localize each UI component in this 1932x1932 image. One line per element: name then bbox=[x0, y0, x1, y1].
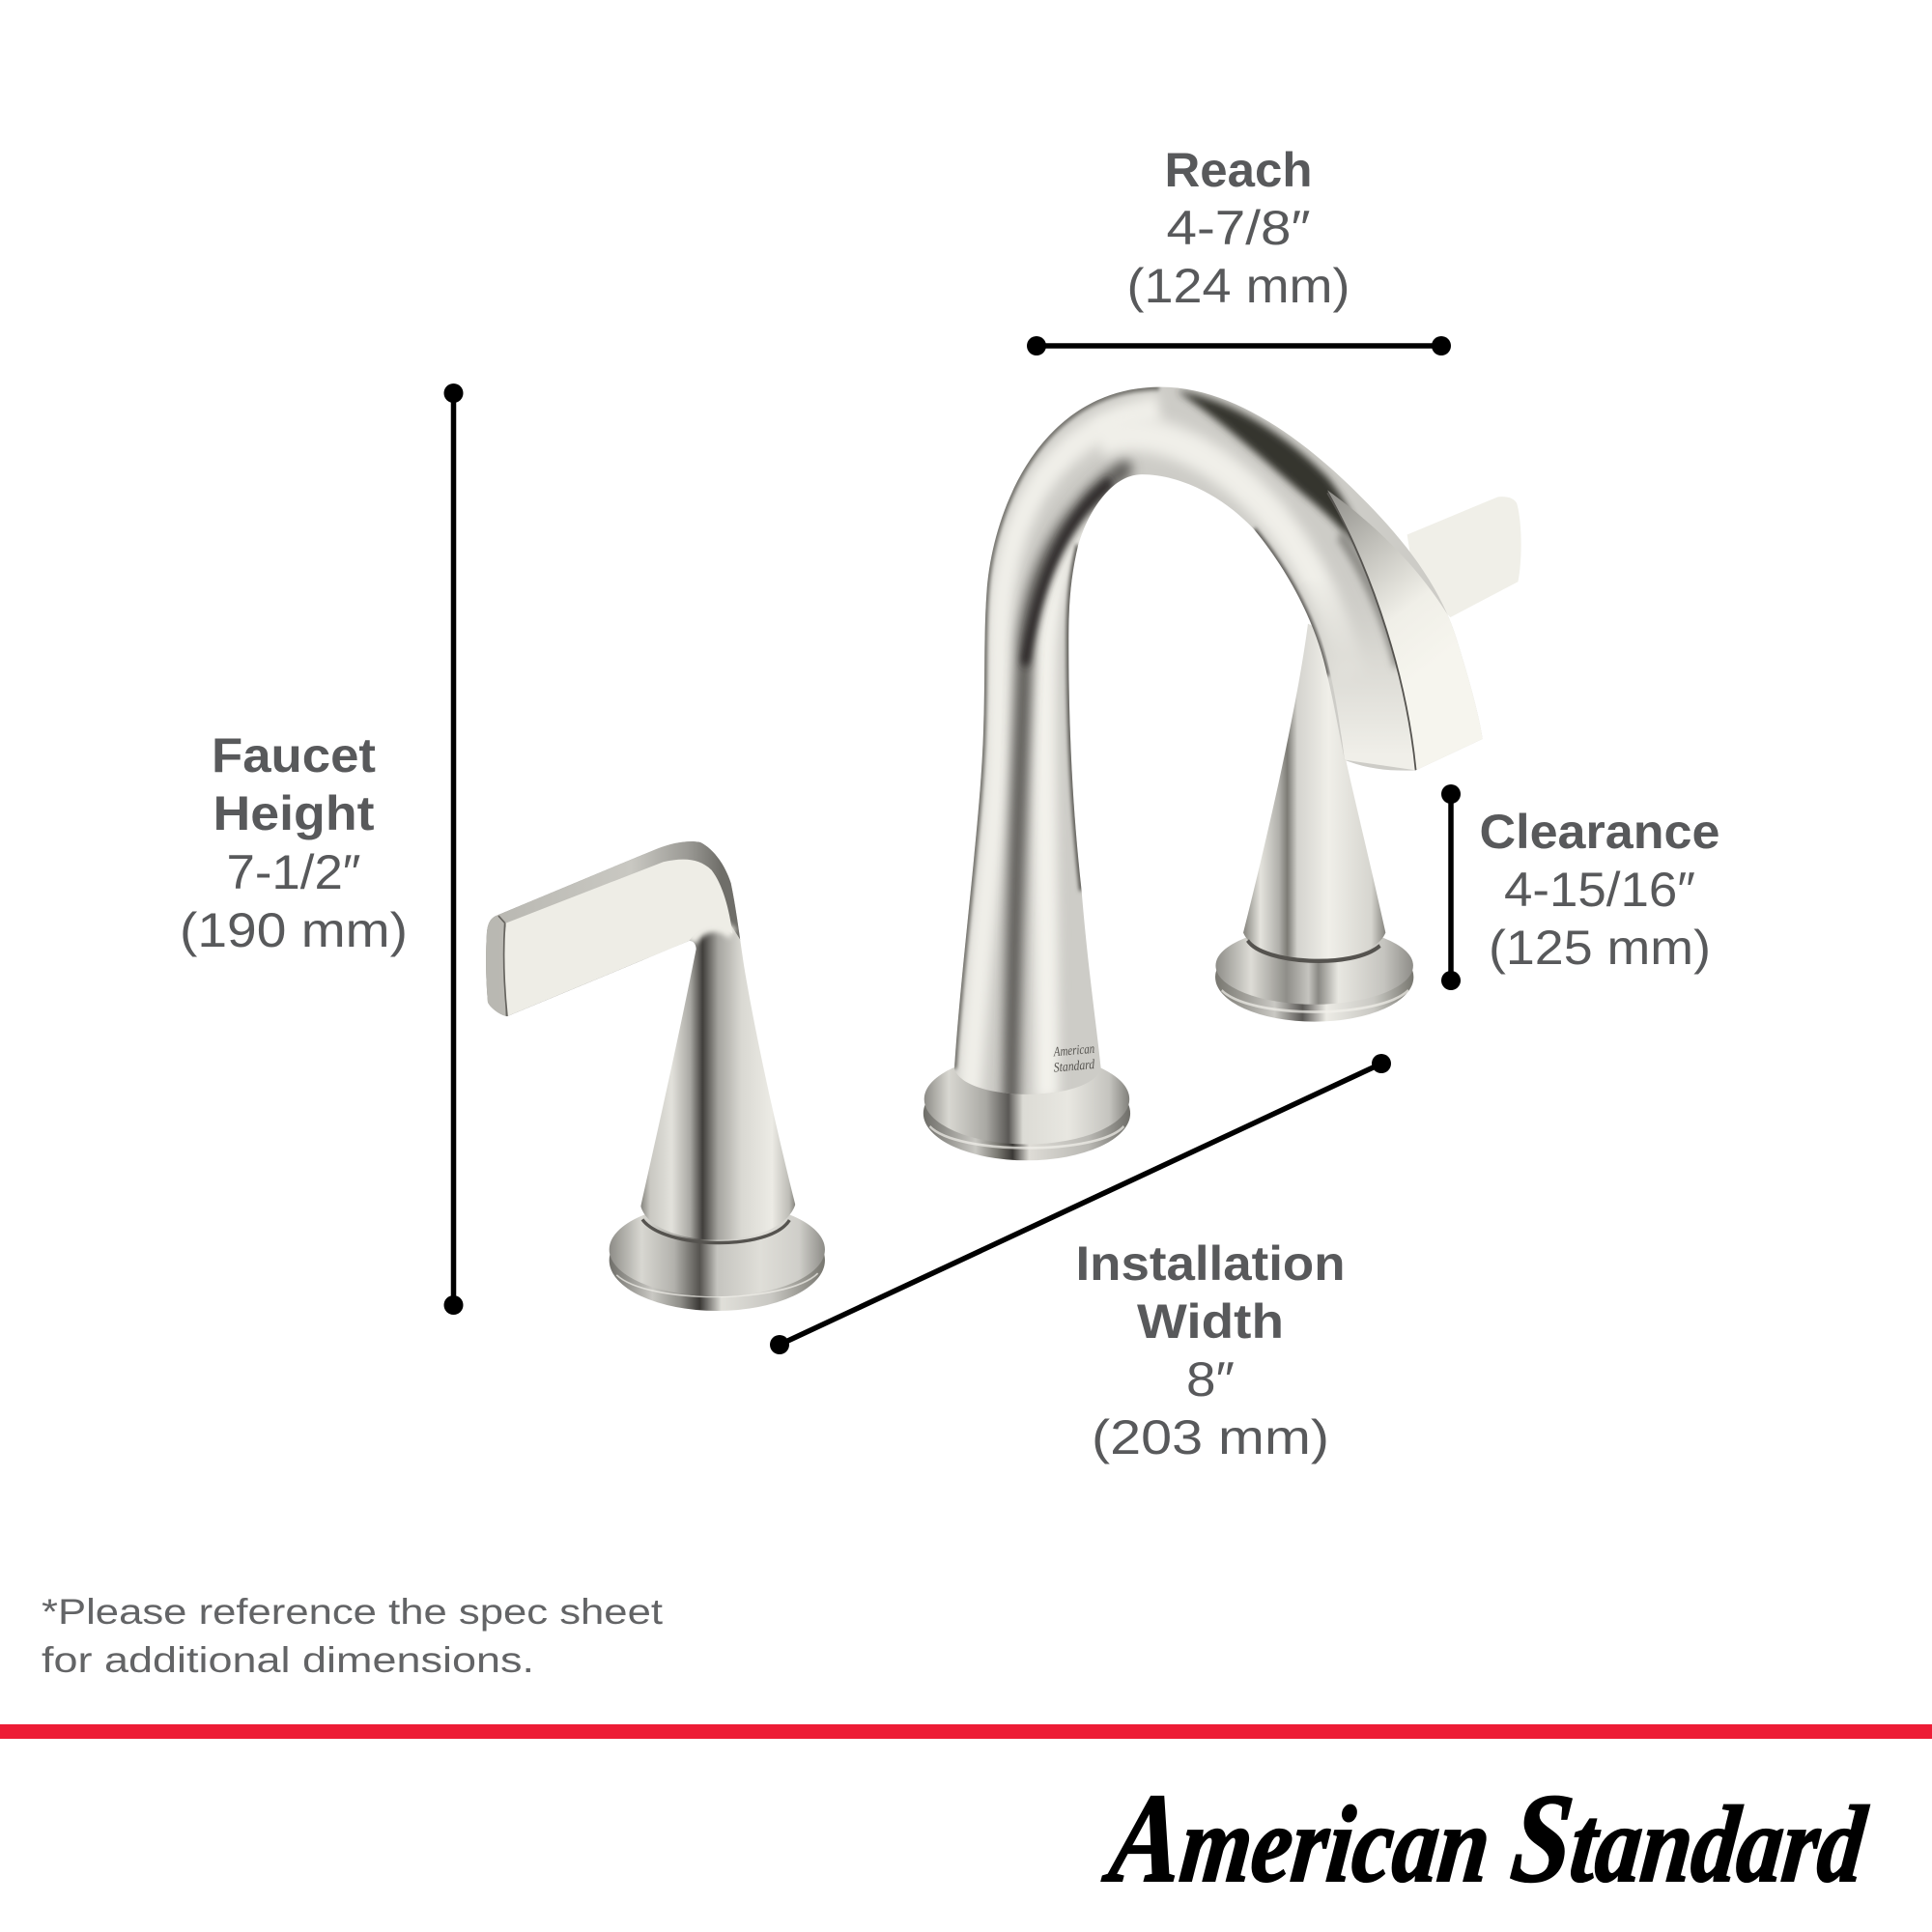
dimension: clearance bbox=[1441, 784, 1719, 990]
clearance label: Clearance bbox=[1480, 805, 1719, 859]
reach label: Reach bbox=[1165, 143, 1312, 197]
spout dark crescent highlight bbox=[1176, 388, 1356, 553]
lever face bbox=[504, 860, 732, 1016]
footnote: *Please reference the spec sheet bbox=[42, 1592, 664, 1632]
right handle groove bbox=[1247, 941, 1380, 961]
right handle base rim bbox=[1215, 932, 1413, 1022]
height label: 7-1/2″ bbox=[226, 845, 361, 899]
installation label: (203 mm) bbox=[1092, 1410, 1329, 1464]
right handle lever bbox=[1407, 497, 1521, 617]
height line bbox=[444, 384, 464, 1315]
spout lower side bbox=[1320, 603, 1415, 771]
dimension: installation width bbox=[770, 1054, 1391, 1464]
reach label bbox=[1126, 143, 1350, 313]
height label bbox=[180, 728, 408, 957]
footnote bbox=[42, 1592, 664, 1680]
spout base dome bbox=[924, 1054, 1129, 1144]
clearance label: (125 mm) bbox=[1489, 921, 1711, 975]
clearance line bbox=[1441, 784, 1461, 990]
height label: Faucet bbox=[212, 728, 376, 782]
dimension: reach bbox=[1027, 143, 1451, 355]
right handle rim highlight bbox=[1222, 990, 1408, 1011]
brand logo: American Standard bbox=[1098, 1767, 1874, 1909]
installation label: 8″ bbox=[1186, 1352, 1235, 1406]
dimension: faucet height bbox=[180, 384, 464, 1315]
right handle cone bbox=[1243, 624, 1385, 960]
faucet product image bbox=[483, 367, 1521, 1311]
spout rim highlight bbox=[929, 1126, 1123, 1148]
reach line bbox=[1027, 336, 1451, 355]
installation line bbox=[770, 1054, 1391, 1354]
installation label: Installation bbox=[1076, 1236, 1345, 1291]
left handle clipped cone and lever bbox=[483, 835, 818, 1239]
spout front face bbox=[1327, 490, 1487, 770]
spout body bbox=[954, 386, 1483, 1094]
left handle base rim bbox=[610, 1209, 825, 1311]
left handle rim highlight bbox=[616, 1273, 818, 1296]
left handle bbox=[483, 835, 825, 1311]
red divider bar bbox=[0, 1724, 1932, 1739]
lever top strip bbox=[483, 838, 744, 1024]
right handle base dome bbox=[1215, 927, 1413, 1005]
logo on spout: American bbox=[1052, 1040, 1095, 1060]
footnote: for additional dimensions. bbox=[42, 1640, 534, 1680]
clearance label bbox=[1480, 805, 1719, 975]
left handle base dome bbox=[610, 1203, 825, 1296]
center spout bbox=[918, 367, 1521, 1160]
spout base rim bbox=[923, 1066, 1130, 1160]
height label: (190 mm) bbox=[180, 903, 408, 957]
left handle groove bbox=[642, 1219, 789, 1243]
logo on spout: Standard bbox=[1053, 1056, 1095, 1075]
installation label: Width bbox=[1137, 1294, 1284, 1349]
height label: Height bbox=[213, 786, 375, 840]
installation label bbox=[1076, 1236, 1345, 1464]
reach label: 4-7/8″ bbox=[1167, 201, 1310, 255]
right handle bbox=[1215, 497, 1521, 1022]
clearance label: 4-15/16″ bbox=[1504, 863, 1695, 917]
reach label: (124 mm) bbox=[1126, 259, 1350, 313]
logo on spout bbox=[1052, 1040, 1095, 1075]
